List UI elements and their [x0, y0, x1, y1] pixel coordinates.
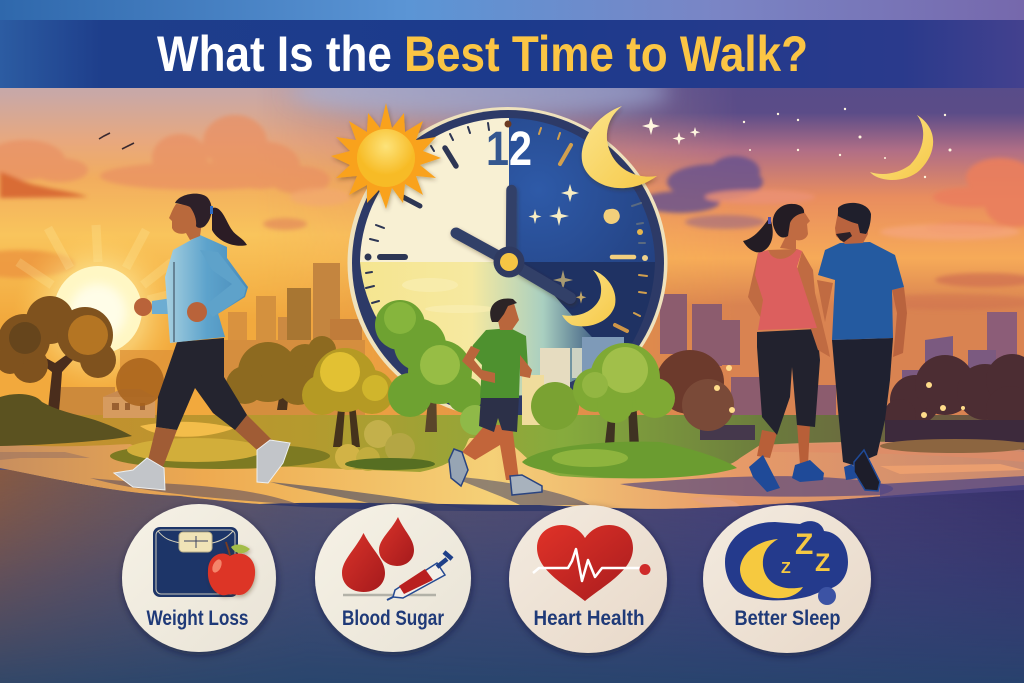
- small crescent moon on the clock: [562, 270, 615, 326]
- path shadows and reflections: [0, 444, 1024, 510]
- birds: [99, 133, 134, 149]
- right trees with lights: [682, 354, 1024, 453]
- woman hair: [773, 204, 804, 238]
- man hair: [838, 203, 871, 234]
- icon: heart: [537, 525, 633, 601]
- label: Better Sleep: [734, 607, 840, 630]
- badge: blood sugar: [315, 504, 471, 652]
- clock hub: [494, 246, 524, 278]
- clock: [348, 107, 668, 419]
- moon in the night sky: [870, 115, 933, 180]
- mid-right trees: [531, 343, 724, 460]
- shirt: [470, 328, 528, 398]
- ground asphalt: [0, 468, 1024, 683]
- man head: [835, 212, 868, 244]
- front shoe: [114, 458, 165, 490]
- clock rim: [348, 107, 668, 419]
- hoodie: [165, 235, 248, 343]
- man pants: [832, 338, 893, 465]
- front sleeve: [152, 298, 178, 314]
- icon: ECG line: [533, 549, 650, 581]
- icon: Z letters: Z: [781, 560, 791, 577]
- man shoes: [844, 464, 859, 480]
- head: [495, 300, 519, 330]
- sun over the clock: [331, 103, 441, 209]
- health benefit badges: [122, 504, 871, 653]
- icon: sleep cloud: [725, 521, 848, 605]
- icon: Z letters: Z: [795, 528, 813, 561]
- rear hand: [187, 302, 207, 322]
- woman in blue jacket walking: [114, 194, 290, 490]
- woman leggings: [757, 329, 820, 435]
- icon: bathroom scale: [153, 527, 238, 597]
- title banner: [0, 20, 1024, 88]
- mid-left trees: [116, 336, 394, 447]
- icon: syringe: [343, 552, 452, 600]
- ponytail: [212, 208, 247, 246]
- mid-left bushes: [110, 420, 435, 471]
- label: Weight Loss: [146, 607, 248, 630]
- head: [169, 204, 202, 240]
- man arms: [817, 280, 833, 322]
- left hedge: [0, 394, 132, 446]
- woman tank top: [755, 249, 817, 330]
- grass and park ground: [0, 415, 1024, 480]
- night stars on the clock: [528, 184, 620, 304]
- stars: [642, 108, 952, 178]
- evening clouds on the right: [640, 156, 1024, 310]
- shorts: [479, 396, 519, 432]
- clock numeral 12: 12: [486, 123, 532, 176]
- left city skyline: [60, 263, 365, 427]
- road: [0, 438, 1024, 509]
- house: [103, 389, 155, 418]
- woman head: [780, 208, 810, 250]
- hands: [134, 298, 152, 316]
- icon: apple: [208, 542, 255, 595]
- calves: [148, 415, 272, 467]
- title: What Is the Best Time to Walk?: [157, 26, 808, 82]
- sky background: [0, 0, 1024, 415]
- couple walking: [743, 203, 907, 492]
- man beard: [836, 232, 852, 242]
- label: Heart Health: [534, 607, 644, 630]
- shoes: [449, 449, 468, 486]
- woman calves: [757, 423, 810, 465]
- trees overlapping the clock: [375, 300, 490, 435]
- label: Blood Sugar: [342, 607, 444, 630]
- center buildings: [522, 337, 624, 425]
- arms: [462, 346, 495, 383]
- man in green shirt jogging: [449, 299, 542, 495]
- large crescent moon over the clock: [582, 106, 657, 188]
- right city skyline: [660, 294, 1017, 425]
- man shirt: [818, 242, 904, 340]
- woman arms: [748, 253, 768, 320]
- clock face quadrants: [360, 118, 655, 396]
- leggings: [156, 338, 247, 430]
- icon: Z letters: Z: [815, 549, 830, 577]
- rising sun: [13, 225, 183, 397]
- left tree: [0, 296, 116, 428]
- sunset clouds on the left: [0, 115, 350, 278]
- legs: [462, 425, 519, 480]
- badge: heart health: [509, 505, 667, 653]
- woman back: [768, 249, 797, 265]
- badge: weight loss: [122, 504, 276, 652]
- icon: blood drops: [342, 517, 414, 592]
- icon: Z letters: [781, 528, 830, 577]
- back shoe: [257, 440, 290, 483]
- grass island: [522, 442, 737, 478]
- woman shoes: [749, 455, 780, 492]
- badge: better sleep: [703, 505, 871, 653]
- icon: crescent moon: [740, 539, 803, 598]
- hair: [175, 194, 212, 228]
- clock hands: [456, 190, 570, 298]
- clock ticks: [366, 123, 489, 355]
